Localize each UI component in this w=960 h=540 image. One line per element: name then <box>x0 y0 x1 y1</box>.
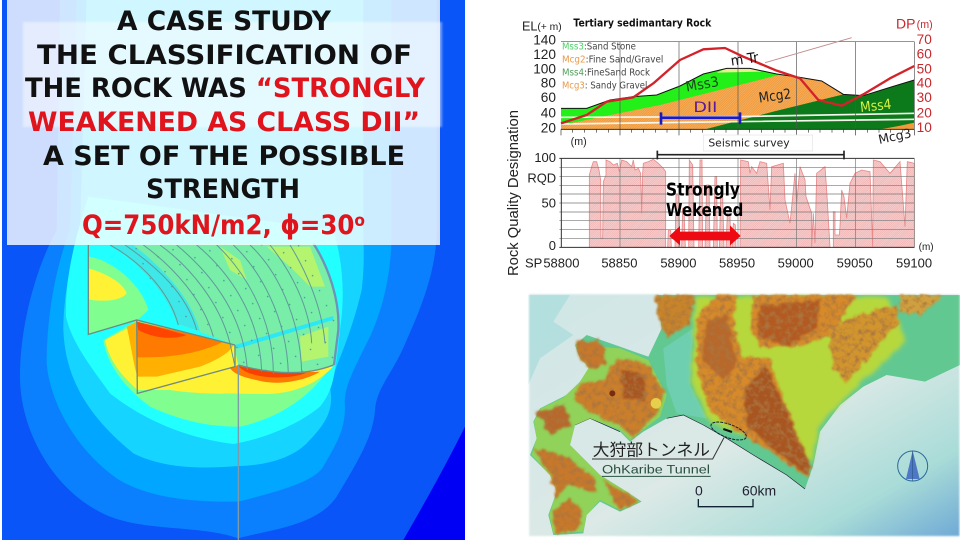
panel: geological profile chart <box>522 16 933 148</box>
RQD grid <box>559 158 914 247</box>
RQD axis labels: 100 <box>534 150 556 165</box>
scale bar: 0 <box>695 483 703 499</box>
scale bar <box>695 483 776 507</box>
axis titles: Tertiary sedimantary Rock <box>573 17 712 30</box>
tunnel name label: 大狩部トンネル <box>593 441 710 460</box>
strongly weakened label: Strongly <box>666 180 740 201</box>
layer labels: m Tr <box>730 50 760 70</box>
tunnel location ellipse <box>709 418 748 444</box>
sea <box>528 293 960 537</box>
left axis labels <box>533 33 556 136</box>
axis titles: (+ m) <box>537 22 562 33</box>
axis titles: (m) <box>571 136 587 148</box>
RQD axis labels: (m) <box>919 242 934 253</box>
layer labels: DII <box>693 100 717 116</box>
lowland teal <box>663 328 707 418</box>
north arrow icon <box>898 451 928 481</box>
red double arrow <box>669 225 741 245</box>
station labels: 58850 <box>601 255 637 270</box>
contour: deep blue corner <box>403 427 465 540</box>
tunnel name label: OhKaribe Tunnel <box>602 463 710 477</box>
mTr leader line <box>765 38 852 63</box>
right axis labels: 30 <box>917 90 932 105</box>
left axis labels: 20 <box>541 121 556 136</box>
tunnel lining surface <box>110 243 338 373</box>
scale bar: 60km <box>742 483 776 499</box>
crater lake <box>651 398 661 409</box>
contour bands <box>20 0 437 538</box>
green zone left of the crown <box>88 257 148 334</box>
axis titles <box>522 16 933 148</box>
station labels: 59000 <box>778 255 814 270</box>
legend: Mss4:FineSand Rock <box>562 67 650 78</box>
axis titles: (m) <box>917 19 933 31</box>
station labels: 59050 <box>837 255 873 270</box>
elevation layers <box>535 295 943 533</box>
station labels: 58800 <box>543 255 579 270</box>
layer labels: Mcg3 <box>877 125 913 147</box>
right axis labels: 40 <box>917 75 932 90</box>
layer labels <box>685 50 913 147</box>
coastline <box>575 415 805 489</box>
axis titles: EL <box>522 20 537 34</box>
legend: Mcg3: Sandy Gravel <box>562 80 647 91</box>
station labels: 59100 <box>896 255 932 270</box>
RQD axis labels: 0 <box>549 238 556 253</box>
layer labels: Mss3 <box>685 74 720 96</box>
title text block: Q=750kN/m2, ϕ=30 <box>82 210 383 241</box>
land base <box>530 295 960 535</box>
layer labels: Mss4 <box>859 97 892 116</box>
layer labels: Mcg2 <box>758 86 792 107</box>
station labels <box>525 255 932 270</box>
station labels: SP <box>525 255 542 270</box>
left axis labels: 100 <box>533 61 556 76</box>
seismic survey label: Seismic survey <box>708 138 790 150</box>
green zone below the section <box>103 321 328 427</box>
RQD bars <box>589 159 914 247</box>
left axis labels: 40 <box>541 105 556 120</box>
right axis labels: 20 <box>917 105 932 120</box>
legend <box>562 41 663 91</box>
DII range bar <box>661 112 740 125</box>
tunnel name label <box>592 438 724 477</box>
seismic survey label <box>703 135 813 151</box>
title text block: A SET OF THE POSSIBLE <box>43 141 405 172</box>
right axis labels: 50 <box>917 61 932 76</box>
y axis title: Rock Quality Designation <box>505 110 522 276</box>
station labels: 58950 <box>719 255 755 270</box>
title text block: WEAKENED AS CLASS DII” <box>28 107 420 138</box>
shallow coast <box>528 295 573 385</box>
panel: tunnel stress contour model <box>2 0 465 540</box>
title text block: THE CLASSIFICATION OF <box>37 40 412 71</box>
tunnel rib lines <box>110 245 325 373</box>
left axis labels: 120 <box>533 47 556 62</box>
station labels: 58900 <box>660 255 696 270</box>
left axis labels: 60 <box>541 90 556 105</box>
soft map edge <box>526 291 960 539</box>
model section outlines <box>88 245 238 540</box>
title text block: A CASE STUDY <box>117 6 331 37</box>
axis titles: DP <box>896 16 915 32</box>
title text block: o <box>354 211 365 231</box>
right axis labels: 70 <box>917 32 932 47</box>
left axis labels: 140 <box>533 33 556 48</box>
title text block: STRENGTH <box>146 174 300 205</box>
RQD axis labels: 50 <box>542 195 556 210</box>
panel: Hokkaido relief map <box>526 291 960 539</box>
west peninsula green <box>532 345 667 533</box>
volcano spot <box>609 390 615 396</box>
grid and axes <box>561 42 914 135</box>
yellow-green lowlands <box>692 297 907 462</box>
right axis labels: 10 <box>917 120 932 135</box>
right axis labels <box>917 32 932 135</box>
panel: RQD chart <box>525 135 934 270</box>
RQD axis labels: RQD <box>527 171 556 186</box>
RQD axis labels <box>527 150 934 253</box>
geological layers <box>561 68 914 129</box>
title text block <box>25 6 425 241</box>
title text block: THE ROCK WAS “STRONGLY <box>25 73 425 104</box>
strongly weakened label <box>666 180 743 221</box>
legend: Mcg2:Fine Sand/Gravel <box>562 54 663 65</box>
left axis labels: 80 <box>541 76 556 91</box>
DP red curve <box>561 48 914 123</box>
text panel backdrop <box>7 0 442 245</box>
seismic survey range <box>657 151 844 159</box>
right axis labels: 60 <box>917 47 932 62</box>
strongly weakened label: Wekened <box>666 200 743 221</box>
legend: Mss3:Sand Stone <box>562 41 636 52</box>
